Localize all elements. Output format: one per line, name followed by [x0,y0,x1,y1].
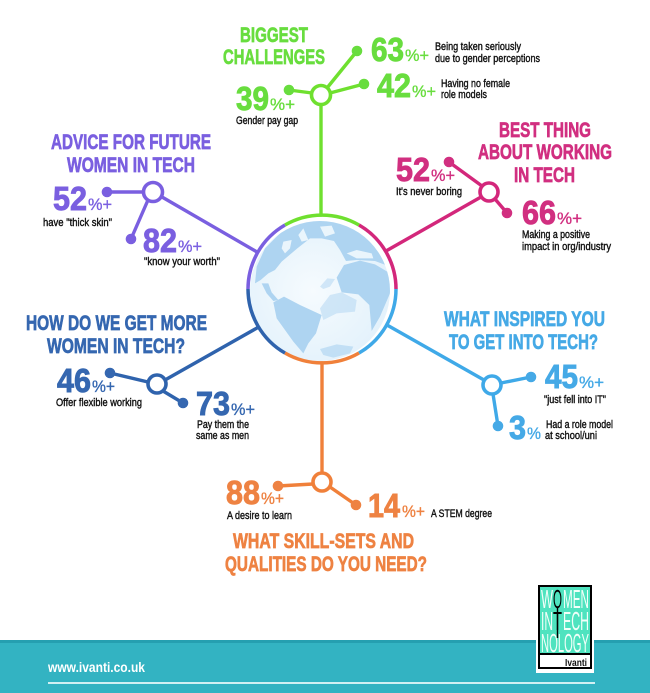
heading [223,24,325,69]
stat 45: "just fell into IT" [544,394,606,406]
heading [225,530,427,576]
stat 63: due to gender perceptions [435,53,540,65]
stat 63: Being taken seriously [435,41,521,53]
heading: IN TECH [514,164,575,187]
heading: WHAT SKILL-SETS AND [233,530,414,553]
stat 42: 42 [377,67,411,104]
panel: best thing about working in tech [386,119,612,253]
stat 73: %+ [231,400,255,419]
logo: women in technology: ECH [563,606,589,636]
stat 66 [522,194,611,253]
stat 73: Pay them the [197,419,249,431]
stat 14: %+ [402,502,425,521]
stat 46 [56,362,142,409]
footer url: www.ivanti.co.uk [47,660,145,675]
heading: WOMEN IN TECH? [47,335,185,358]
panel: what inspired you [387,308,613,446]
stat 3: 3 [509,409,526,446]
stat 39 [236,80,298,127]
stat 45: %+ [579,373,604,392]
stat 66: impact in org/industry [522,241,611,253]
stat 3: Had a role model [546,419,613,431]
heading [51,131,211,177]
stat 52: have "thick skin" [43,217,112,229]
stat 3: % [527,424,541,443]
connector lines [273,363,361,510]
panel: skill-sets and qualities [225,363,492,576]
heading: HOW DO WE GET MORE [26,312,207,335]
stat 3: at school/uni [545,430,597,442]
stat 3 [509,409,613,446]
connector lines [102,182,257,252]
heading: ADVICE FOR FUTURE [51,131,211,154]
stat 39: Gender pay gap [236,115,298,127]
logo: women in technology: IN [541,606,553,636]
heading: BIGGEST [240,24,308,47]
logo: women in technology: W [541,584,553,614]
stat 82 [143,222,220,268]
stat 52: 52 [53,180,87,217]
stat 14: A STEM degree [431,508,492,520]
stat 63 [371,31,540,68]
globe [248,215,396,363]
heading: CHALLENGES [223,46,325,69]
logo: women in technology: T [553,606,562,636]
stat 39: %+ [270,95,295,114]
heading [26,312,207,358]
stat 63: 63 [371,31,404,68]
panel: how do we get more women in tech [26,312,257,442]
stat 52: %+ [431,166,455,185]
stat 39: 39 [236,80,269,117]
stat 73 [196,385,255,442]
stat 46: %+ [92,377,115,396]
stat 63: %+ [405,46,429,65]
stat 88 [226,474,292,522]
stat 46: 46 [57,362,91,399]
logo: women in technology: Ivanti [565,658,587,669]
stat 66: %+ [557,209,582,228]
panel: biggest challenges [223,24,540,215]
stat 52 [396,151,462,198]
stat 82: "know your worth" [144,256,220,268]
stat 73: same as men [196,430,249,442]
stat 42 [377,67,510,104]
connector lines [284,46,369,215]
stat 52 [43,180,112,229]
stat 66: 66 [522,194,556,231]
stat 42: role models [441,89,487,101]
stat 45 [544,358,606,406]
stat 14: 14 [368,487,401,524]
stat 88: A desire to learn [227,510,292,522]
connector lines [387,325,536,431]
heading: BEST THING [499,119,591,142]
stat 73: 73 [196,385,230,422]
text: NOLOGY [541,628,589,658]
stat 45: 45 [545,358,578,395]
heading: QUALITIES DO YOU NEED? [225,553,427,576]
stat 82: 82 [143,222,177,259]
stat 52: %+ [88,195,112,214]
stat 88: 88 [226,474,260,511]
stat 66: Making a positive [522,229,590,241]
stat 42: Having no female [441,78,510,90]
panel: advice for future women in tech [43,131,257,268]
stat 52: 52 [396,151,430,188]
logo: women in technology [536,583,594,673]
stat 14 [368,487,492,524]
logo: women in technology: O [553,584,562,614]
heading: WOMEN IN TECH [67,154,195,177]
heading [478,119,612,187]
stat 82: %+ [178,237,202,256]
stat 52: It's never boring [396,186,462,198]
heading [444,308,605,354]
stat 42: %+ [412,82,436,101]
stat 46: Offer flexible working [56,397,142,409]
stat 88: %+ [261,489,284,508]
connector lines [386,157,512,251]
logo: women in technology: MEN [563,584,589,614]
globe ring [248,215,396,363]
connector lines [105,328,257,408]
footer band [0,640,650,693]
